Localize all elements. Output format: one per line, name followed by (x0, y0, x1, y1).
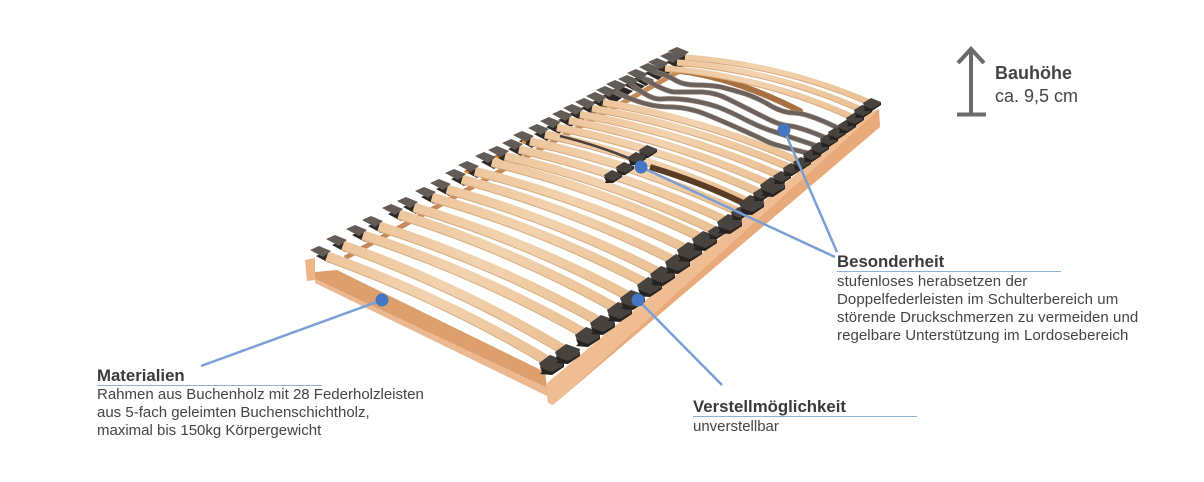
shoulder adjustment sliders (604, 145, 657, 183)
icon: height arrow (957, 49, 986, 115)
callout: Verstellmöglichkeit: unverstellbar (693, 418, 779, 435)
callout: Materialien: maximal bis 150kg Körpergewicht (97, 422, 321, 439)
left holder undersides (316, 53, 695, 263)
callout: Materialien: aus 5-fach geleimten Buchenschichtholz, (97, 404, 370, 421)
callout: Besonderheit: Doppelfederleisten im Schulterbereich um (837, 291, 1118, 308)
callout: Materialien (97, 366, 424, 439)
wavy double spring slats (615, 72, 838, 154)
callout: Besonderheit: störende Druckschmerzen zu vermeiden und (837, 309, 1138, 326)
right side rail (547, 109, 880, 405)
leader line: Verstellmöglichkeit (632, 294, 722, 385)
callout: Besonderheit: stufenloses herabsetzen der (837, 273, 1027, 290)
callout: Besonderheit: Besonderheit (837, 252, 944, 271)
callout: Verstellmöglichkeit: Verstellmöglichkeit (693, 397, 846, 416)
left side rail behind slats (345, 68, 685, 258)
callout: Materialien: Materialien (97, 366, 185, 385)
callout: Besonderheit: regelbare Unterstützung im Lordosebereich (837, 327, 1128, 344)
callout: Bauhöhe: Bauhöhe (995, 63, 1072, 83)
callout: Materialien: Rahmen aus Buchenholz mit 28 Federholzleisten (97, 386, 424, 403)
wooden slats (327, 57, 872, 364)
callout: Bauhöhe (995, 63, 1078, 106)
callout: Verstellmöglichkeit (693, 397, 917, 435)
callout: Bauhöhe: ca. 9,5 cm (995, 86, 1078, 106)
corner post (305, 258, 315, 281)
leader line: Besonderheit shoulder (634, 160, 835, 257)
leader line: Besonderheit lordosis (778, 124, 837, 252)
slatted bed frame (305, 47, 881, 405)
right end slat holders (539, 98, 881, 375)
front rail of frame (315, 270, 547, 396)
leader line: Materialien (201, 294, 388, 366)
left end slat holders (310, 47, 689, 257)
brown underlay of the double slat (680, 71, 800, 111)
callout: Besonderheit (837, 252, 1138, 344)
shoulder zone dark bar (560, 136, 743, 203)
orange adjusters (465, 128, 846, 289)
